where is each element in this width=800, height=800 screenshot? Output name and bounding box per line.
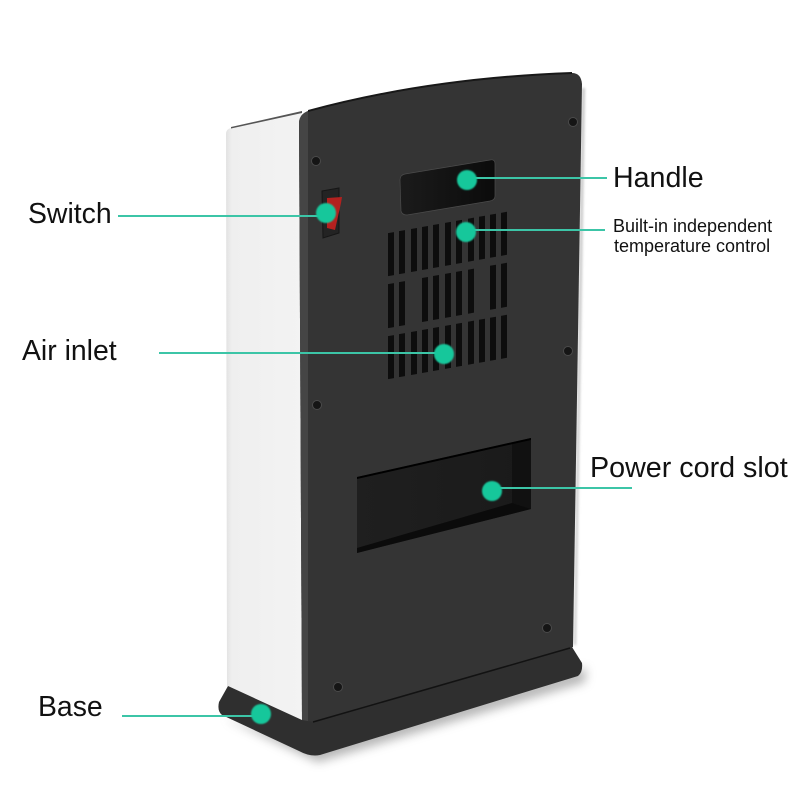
base top seam bbox=[313, 648, 570, 722]
callout: switch bbox=[28, 198, 336, 230]
callout: air inlet: Air inlet bbox=[22, 335, 117, 367]
back panel top edge bbox=[308, 72, 572, 112]
callout: handle bbox=[457, 162, 704, 194]
handle recess bbox=[400, 160, 495, 215]
vent row 3 bbox=[388, 315, 507, 379]
back panel left bevel bbox=[299, 111, 308, 721]
callout: built-in independent temperature control bbox=[456, 216, 772, 256]
power cord slot bbox=[357, 438, 531, 553]
callout: air inlet bbox=[22, 335, 454, 367]
vent row 2 bbox=[388, 263, 507, 328]
right edge shadow bbox=[574, 88, 585, 645]
callout: built-in independent temperature control: Built-in independent bbox=[613, 216, 772, 236]
base bbox=[218, 647, 582, 756]
top edge of side bbox=[231, 111, 302, 128]
callout: base bbox=[38, 691, 271, 724]
vent grille bbox=[388, 212, 507, 379]
callout: switch: Switch bbox=[28, 198, 112, 230]
callout: built-in independent temperature control: temperature control bbox=[614, 236, 770, 256]
callout: power cord slot: Power cord slot bbox=[590, 452, 788, 484]
heater device bbox=[218, 72, 586, 762]
white side panel bbox=[226, 112, 302, 722]
callout: handle: Handle bbox=[613, 162, 704, 194]
screws bbox=[312, 118, 578, 692]
callout: power cord slot bbox=[482, 452, 788, 501]
base shadow bbox=[225, 668, 586, 762]
vent row 1 bbox=[388, 212, 507, 276]
back panel bbox=[299, 73, 582, 722]
callout: base: Base bbox=[38, 691, 103, 723]
switch bbox=[322, 188, 342, 238]
